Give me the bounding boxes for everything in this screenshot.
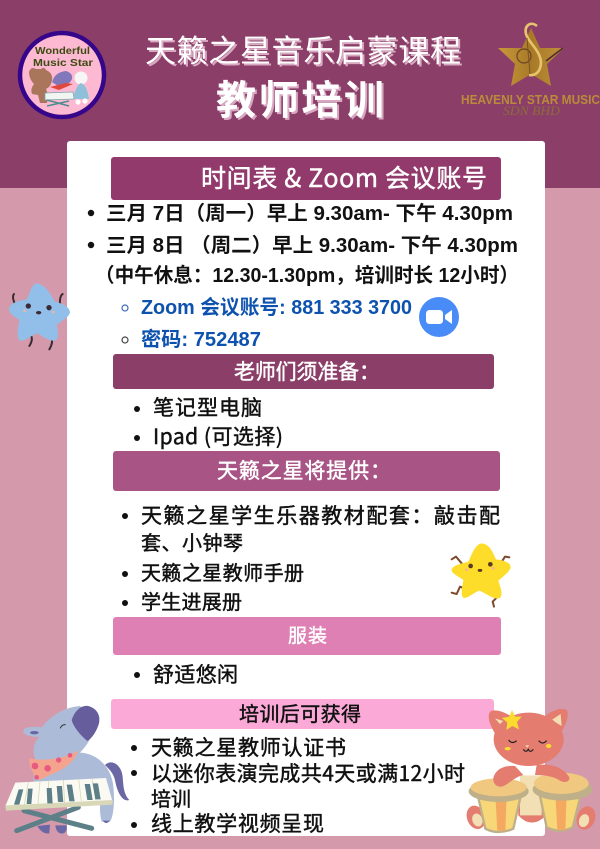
- heading bar: schedule: [111, 157, 501, 200]
- after training list: 天籁之星教师认证书: [151, 732, 346, 762]
- illustration: cat playing bongo drums: [463, 709, 599, 832]
- schedule list: [88, 202, 519, 287]
- after training list: 培训: [151, 783, 191, 812]
- heading bar: provides: 天籁之星将提供：: [217, 455, 391, 485]
- heading bar: after training: [111, 698, 494, 729]
- subtitle: 教师培训: [218, 81, 386, 125]
- logo: Heavenly Star Music: [461, 24, 600, 118]
- logo: Wonderful Music Star: [20, 33, 104, 117]
- section: schedule and Zoom account: [88, 157, 519, 351]
- provides list: 学生进展册: [141, 586, 242, 615]
- header band: [0, 0, 600, 188]
- schedule list: 三月 7日（周一）早上 9.30am- 下午 4.30pm: [106, 202, 513, 225]
- heading bar: prepare: [113, 354, 494, 389]
- title: 天籁之星音乐启蒙课程: [145, 34, 461, 69]
- after training list: 以迷你表演完成共4天或满12小时: [151, 758, 465, 788]
- heading bar: provides: [113, 451, 500, 491]
- after training list: [131, 732, 465, 838]
- main white panel: [67, 141, 545, 836]
- Zoom details: 密码: 752487: [141, 327, 261, 351]
- provides list: 天籁之星学生乐器教材配套：敲击配: [141, 500, 500, 530]
- heading bar: schedule: 时间表 & Zoom 会议账号: [201, 159, 487, 195]
- illustration: horse playing keyboard: [5, 706, 129, 833]
- section: teachers must prepare: [113, 354, 494, 451]
- provides list: 天籁之星教师手册: [141, 557, 304, 586]
- schedule list: （中午休息：12.30-1.30pm，培训时长 12小时）: [95, 263, 519, 287]
- title: 天籁之星音乐启蒙课程: [147, 36, 463, 71]
- provides list: [122, 500, 500, 615]
- schedule list: 三月 8日 （周二）早上 9.30am- 下午 4.30pm: [106, 234, 518, 257]
- heading bar: attire: 服装: [288, 621, 327, 648]
- heading bar: prepare: 老师们须准备：: [234, 356, 380, 386]
- illustration: blue star character: [9, 283, 70, 349]
- section: attire: [113, 617, 501, 689]
- after training list: 线上教学视频呈现: [151, 808, 324, 838]
- illustration: yellow star character: [452, 543, 511, 607]
- Zoom details: [122, 296, 412, 351]
- subtitle: 教师培训: [216, 79, 384, 123]
- heading bar: after training: 培训后可获得: [239, 698, 361, 727]
- logo: Wonderful Music Star: Wonderful: [35, 46, 90, 57]
- prepare list: Ipad (可选择): [153, 421, 283, 451]
- icon: Zoom camera: [419, 297, 459, 337]
- section: what Heavenly Star provides: [113, 451, 500, 615]
- prepare list: 笔记型电脑: [153, 392, 262, 422]
- provides list: 套、小钟琴: [141, 527, 243, 556]
- logo: Heavenly Star Music: SDN BHD: [503, 103, 561, 118]
- Zoom details: Zoom 会议账号: 881 333 3700: [141, 296, 412, 319]
- section: after training: [111, 698, 494, 838]
- attire list: 舒适悠闲: [153, 659, 238, 689]
- heading bar: attire: [113, 617, 501, 655]
- prepare list: [134, 392, 283, 451]
- logo: Wonderful Music Star: Music Star: [33, 58, 93, 69]
